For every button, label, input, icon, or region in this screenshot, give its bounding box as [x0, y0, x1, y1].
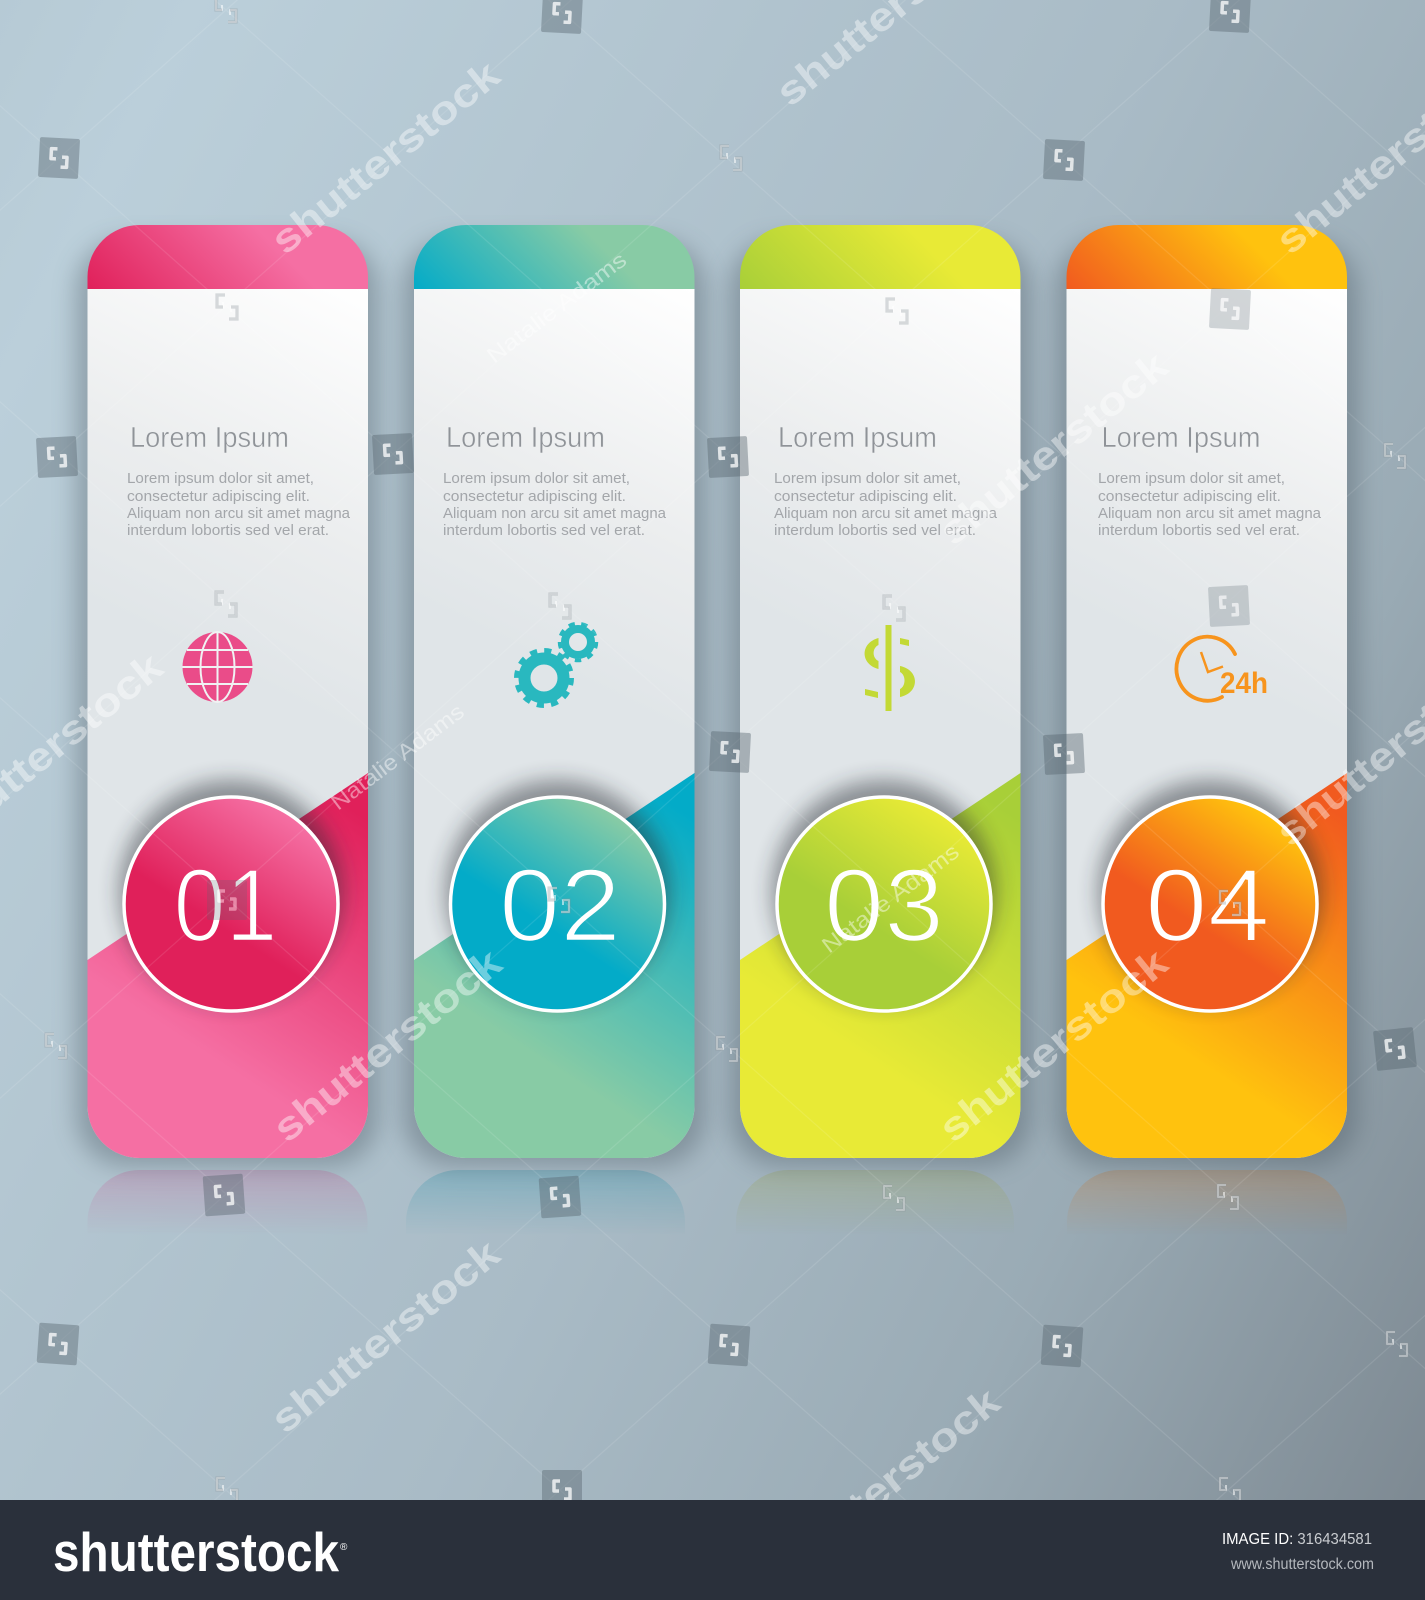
- card 2 white body: [414, 289, 694, 1158]
- card 2 body text: [443, 471, 667, 539]
- card 2 number badge: 02: [499, 848, 621, 964]
- card 1 body text: [127, 471, 351, 539]
- card 4 body text: [1098, 471, 1322, 539]
- panel: card 4: [1066, 225, 1347, 1158]
- card 3 body text: Lorem ipsum dolor sit amet,: [774, 471, 961, 487]
- floor reflections of the cards: [88, 1170, 1346, 1222]
- watermark text: shutterstock: [763, 1379, 1009, 1590]
- card 1 body text: Lorem ipsum dolor sit amet,: [127, 471, 314, 487]
- panel: card 2: [414, 225, 694, 1158]
- card 1 body text: interdum lobortis sed vel erat.: [127, 523, 329, 539]
- card 3 white body: [740, 289, 1020, 1158]
- card 2 number badge: [450, 797, 664, 1011]
- card 1 title: Lorem Ipsum: [130, 422, 289, 454]
- card 1 body text: consectetur adipiscing elit.: [127, 489, 310, 505]
- card 1 coloured bottom: [88, 773, 368, 1158]
- card 4 number badge: [1103, 797, 1317, 1011]
- icon: gears: [516, 624, 596, 706]
- card 3 title: Lorem Ipsum: [778, 422, 937, 454]
- watermark text: shutterstock: [265, 940, 511, 1151]
- card 1 circle shadow: [119, 780, 343, 1004]
- card 2 header band: [414, 225, 694, 289]
- card 3 body text: interdum lobortis sed vel erat.: [774, 523, 976, 539]
- icon: dollar sign: [865, 625, 915, 711]
- watermark author name: Natalie Adams: [482, 247, 631, 368]
- card 3 body text: consectetur adipiscing elit.: [774, 489, 957, 505]
- card 2 body text: consectetur adipiscing elit.: [443, 489, 626, 505]
- watermark text: shutterstock: [931, 940, 1177, 1151]
- icon: globe: [182, 632, 252, 702]
- card 4 body text: interdum lobortis sed vel erat.: [1098, 523, 1300, 539]
- card 2 coloured bottom: [414, 773, 694, 1158]
- card 2 body text: Lorem ipsum dolor sit amet,: [443, 471, 630, 487]
- watermark author name: Natalie Adams: [326, 699, 469, 815]
- panel: card 3: [740, 225, 1020, 1158]
- card 2 title: Lorem Ipsum: [446, 422, 605, 454]
- website: www.shutterstock.com: [1230, 1556, 1374, 1573]
- footer bar: [0, 1500, 1425, 1600]
- card 2 body text: interdum lobortis sed vel erat.: [443, 523, 645, 539]
- watermark text: shutterstock: [263, 52, 509, 263]
- card 3 circle shadow: [772, 780, 996, 1004]
- card shadows: [76, 240, 1358, 1166]
- card 4 circle shadow: [1098, 780, 1322, 1004]
- card 4 body text: Lorem ipsum dolor sit amet,: [1098, 471, 1285, 487]
- watermark text: shutterstock: [931, 343, 1177, 554]
- card 3 body text: [774, 471, 998, 539]
- card 4 header band: [1066, 225, 1347, 289]
- panel: card 1: [88, 225, 368, 1158]
- card 4 number badge: 04: [1145, 848, 1270, 964]
- icon: 24h clock: 24h: [1220, 667, 1268, 700]
- card 1 header band: [88, 225, 368, 289]
- card 2 body text: Aliquam non arcu sit amet magna: [443, 506, 667, 522]
- icon: 24h clock: [1176, 637, 1268, 701]
- card 1 number badge: [124, 797, 338, 1011]
- card 4 white body: [1066, 289, 1347, 1158]
- card 1 white body: [88, 289, 368, 1158]
- card 1 body text: Aliquam non arcu sit amet magna: [127, 506, 351, 522]
- card 3 body text: Aliquam non arcu sit amet magna: [774, 506, 998, 522]
- card 4 body text: Aliquam non arcu sit amet magna: [1098, 506, 1322, 522]
- watermark text: shutterstock: [263, 1231, 509, 1442]
- card 1 number badge: 01: [174, 848, 278, 964]
- watermark author name: Natalie Adams: [817, 839, 964, 958]
- card 4 body text: consectetur adipiscing elit.: [1098, 489, 1281, 505]
- card 3 header band: [740, 225, 1020, 289]
- image id: IMAGE ID: 316434581: [1222, 1531, 1372, 1548]
- card 3 coloured bottom: [740, 773, 1020, 1158]
- registered mark: ®: [340, 1542, 348, 1553]
- watermark author name: [326, 247, 964, 958]
- card 4 coloured bottom: [1066, 773, 1347, 1158]
- card 3 number badge: 03: [824, 848, 944, 964]
- card 3 number badge: [777, 797, 991, 1011]
- card 4 title: Lorem Ipsum: [1102, 422, 1260, 454]
- footer logo: shutterstock: [53, 1521, 339, 1583]
- card 2 circle shadow: [446, 780, 670, 1004]
